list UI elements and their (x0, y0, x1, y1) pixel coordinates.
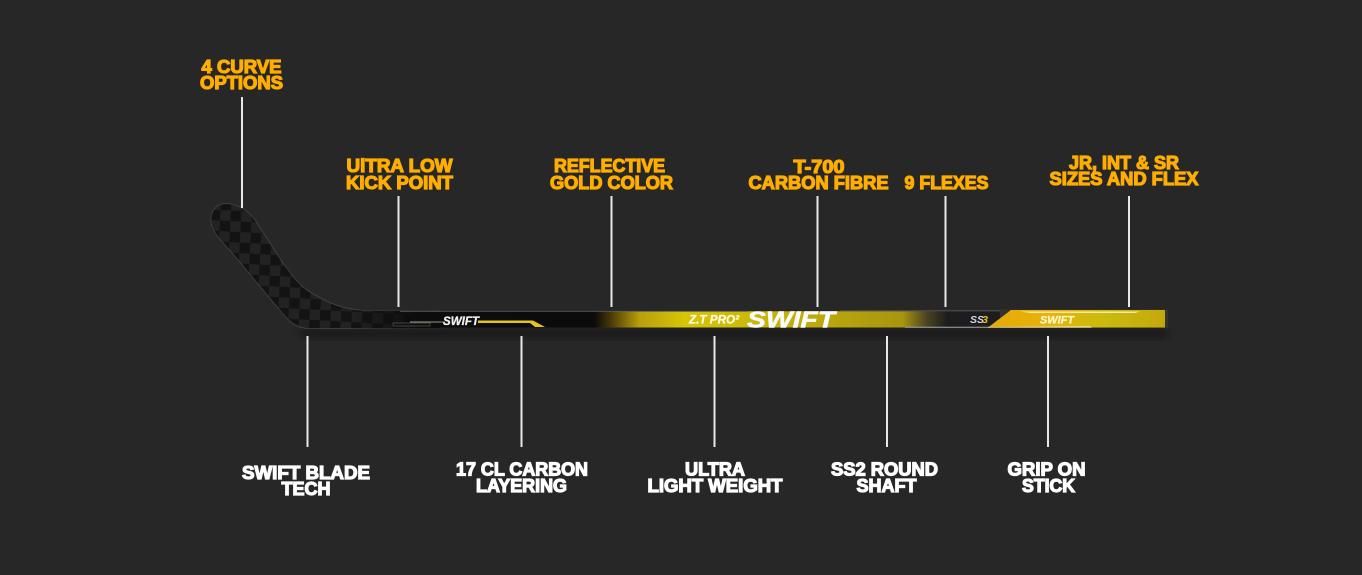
callout: 4 curve options: 4 CURVE (202, 57, 282, 77)
callout: 17 cl carbon layering: 17 CL CARBON (456, 460, 588, 480)
callout: jr int sr sizes and flex: JR, INT & SR (1069, 153, 1179, 173)
callout: reflective gold color (550, 156, 673, 307)
callout: ss2 round shaft: SHAFT (856, 476, 916, 496)
callout: ultra low kick point (346, 156, 453, 307)
small spec print (393, 323, 430, 326)
logo: small swift: SWIFT (443, 316, 480, 328)
callout: swift blade tech: TECH (282, 479, 330, 499)
callout: jr int sr sizes and flex: SIZES AND FLEX (1050, 169, 1198, 189)
callout: 17 cl carbon layering (456, 336, 588, 496)
callout: 9 flexes: 9 FLEXES (904, 173, 988, 193)
callout: grip on stick (1008, 336, 1086, 496)
callout: ss2 round shaft: SS2 ROUND (831, 460, 938, 480)
stick shadow (300, 331, 1168, 336)
callout: 9 flexes (904, 173, 988, 307)
callout: reflective gold color: GOLD COLOR (550, 173, 673, 193)
shaft (430, 311, 1000, 328)
callout: ultra low kick point: KICK POINT (346, 173, 453, 193)
callout: ultra light weight: LIGHT WEIGHT (648, 476, 783, 496)
logo: ZT Pro: Z.T PRO² (688, 312, 740, 326)
callout: t-700 carbon fibre (748, 157, 888, 307)
callout: 4 curve options: OPTIONS (200, 73, 283, 93)
yellow accent stripe (478, 320, 545, 327)
callout: ultra low kick point: UlTRA LOW (346, 156, 453, 176)
callout: 17 cl carbon layering: LAYERING (476, 476, 567, 496)
callout: grip on stick: GRIP ON (1008, 460, 1086, 480)
callout: swift blade tech (242, 336, 370, 499)
logo: SS2: SS (970, 315, 984, 326)
callout: grip on stick: STICK (1022, 476, 1075, 496)
callout: jr int sr sizes and flex (1050, 153, 1198, 307)
callout: ultra light weight: ULTRA (685, 460, 745, 480)
callout: 4 curve options (200, 57, 283, 208)
logo: SS2: 3 (982, 315, 988, 326)
hockey stick (211, 204, 1168, 336)
blade with checkered carbon pattern (211, 204, 442, 330)
logo: grip swift: SWIFT (1040, 314, 1075, 326)
callout: t-700 carbon fibre: CARBON FIBRE (748, 173, 888, 193)
callout: swift blade tech: SWIFT BLADE (242, 463, 370, 483)
callout: reflective gold color: REFLECTIVE (554, 156, 665, 176)
grip section (988, 310, 1168, 328)
logo: large swift: SWIFT (747, 306, 837, 332)
callout: ss2 round shaft (831, 336, 938, 496)
callout: t-700 carbon fibre: T-700 (794, 157, 844, 177)
callout: ultra light weight (648, 336, 783, 496)
